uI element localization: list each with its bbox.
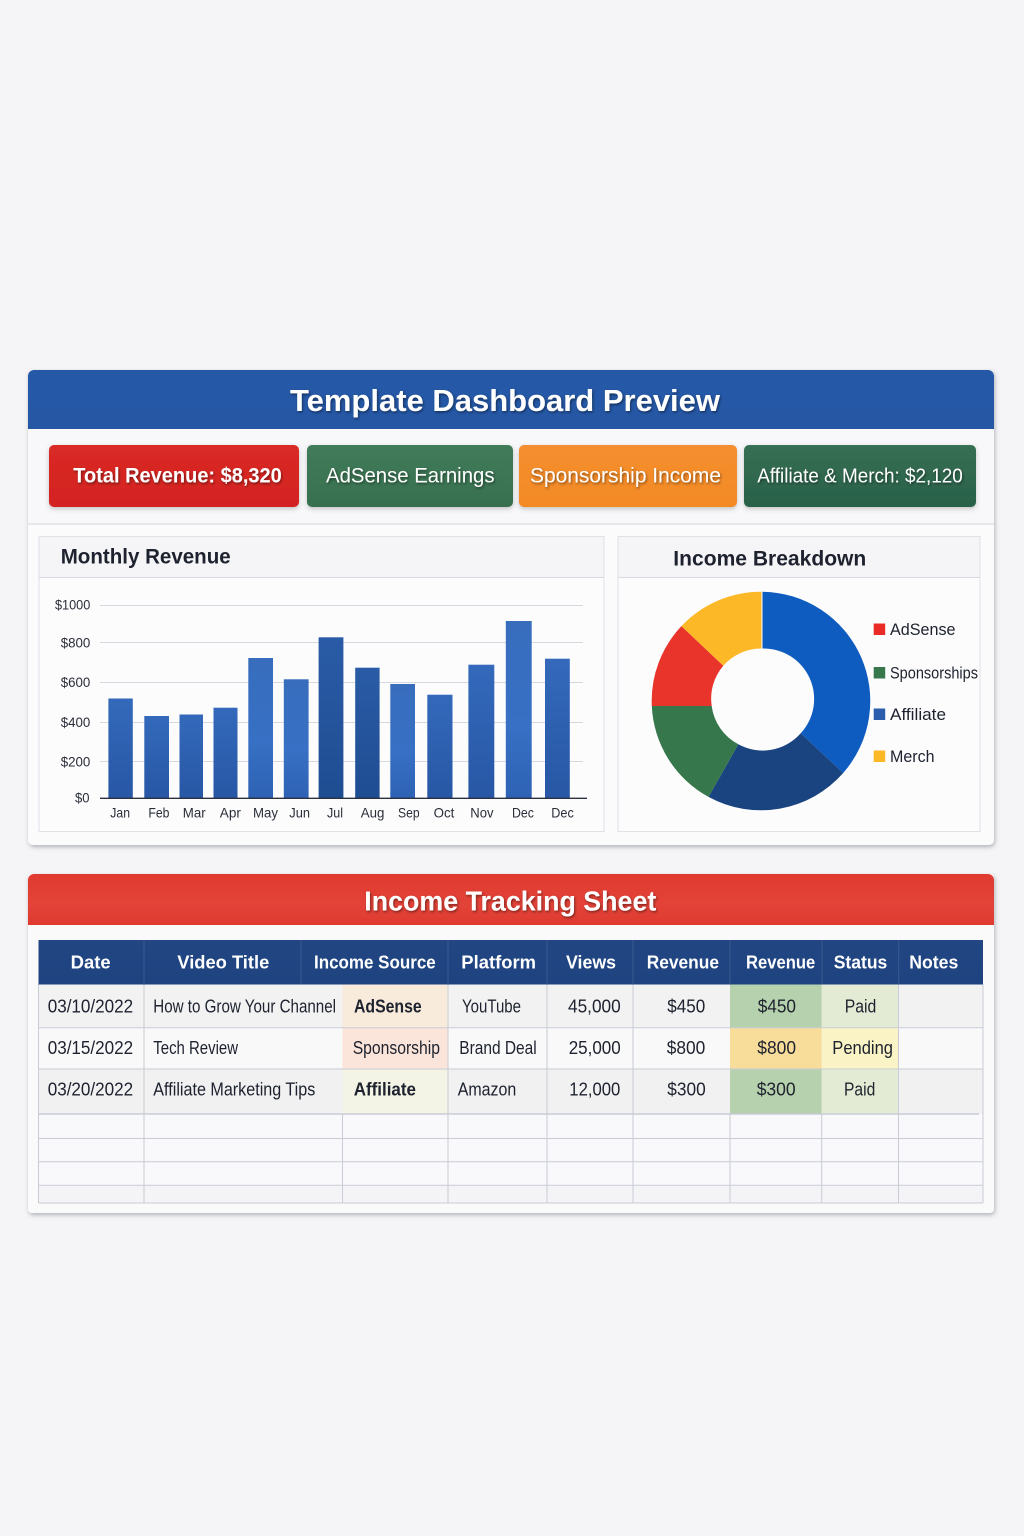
table header row: Notes xyxy=(909,952,958,972)
table row: 03/10/2022: YouTube xyxy=(462,997,521,1017)
table header row: Platform xyxy=(461,952,536,972)
table row: 03/10/2022: $450 xyxy=(758,997,796,1017)
table row: 03/15/2022: Brand Deal xyxy=(459,1038,537,1058)
KPI tile: adsense earnings xyxy=(307,445,513,507)
highlighted cells xyxy=(342,984,899,1114)
table xyxy=(38,940,983,1203)
table row: 03/20/2022: Paid xyxy=(844,1080,875,1100)
table header row xyxy=(38,940,983,984)
table row: 03/15/2022: Tech Review xyxy=(153,1038,239,1058)
table row: 03/10/2022: AdSense xyxy=(354,997,422,1017)
x axis labels: Jul xyxy=(327,805,343,821)
dashboard card body xyxy=(28,370,994,845)
panel: monthly revenue xyxy=(39,536,604,832)
table row: 03/15/2022 xyxy=(48,1038,893,1058)
x axis labels: Dec xyxy=(551,805,574,821)
KPI tile: total revenue xyxy=(49,445,299,507)
x axis labels: May xyxy=(253,805,278,821)
heading: income tracking sheet: Income Tracking Sheet xyxy=(364,886,656,916)
table header row: Income Source xyxy=(314,952,436,972)
x axis labels: Jun xyxy=(289,805,310,821)
table row: 03/10/2022: 45,000 xyxy=(568,997,621,1017)
heading: income breakdown: Income Breakdown xyxy=(673,548,866,570)
bar chart: monthly revenue xyxy=(55,596,587,821)
legend item: merch: Merch xyxy=(890,748,934,766)
table header row: Revenue xyxy=(746,952,815,972)
legend item: affiliate: Affiliate xyxy=(890,706,946,724)
x axis labels xyxy=(110,805,574,821)
KPI tile: total revenue: Total Revenue: $8,320 xyxy=(73,465,282,488)
table header row: Video Title xyxy=(177,952,269,972)
y axis labels: $400 xyxy=(61,714,90,730)
x axis labels: Apr xyxy=(220,805,241,821)
y axis labels: $200 xyxy=(61,753,90,769)
table row: 03/10/2022: Paid xyxy=(845,997,876,1017)
table header row: Views xyxy=(566,952,616,972)
table row: 03/15/2022: $800 xyxy=(757,1038,796,1058)
x axis labels: Nov xyxy=(470,805,494,821)
table row: 03/10/2022: How to Grow Your Channel xyxy=(153,997,336,1017)
legend item: adsense: AdSense xyxy=(890,621,956,639)
table row: 03/20/2022: Amazon xyxy=(458,1080,516,1100)
KPI tile: affiliate and merch xyxy=(744,445,976,507)
table row: 03/20/2022: 12,000 xyxy=(569,1080,620,1100)
table row: 03/20/2022 xyxy=(48,1080,875,1100)
panel: income breakdown xyxy=(618,536,980,832)
table row: 03/10/2022: $450 xyxy=(667,997,705,1017)
x axis labels: Feb xyxy=(148,805,170,821)
legend xyxy=(874,621,978,766)
heading: monthly revenue: Monthly Revenue xyxy=(61,546,231,568)
tracking sheet card body xyxy=(28,874,994,1213)
table header row: Revenue xyxy=(647,952,719,972)
y axis labels: $600 xyxy=(61,674,90,690)
table row: 03/20/2022: Affiliate Marketing Tips xyxy=(153,1080,315,1100)
x axis labels: Mar xyxy=(183,805,206,821)
table row: 03/15/2022: Sponsorship xyxy=(353,1038,440,1058)
x axis labels: Oct xyxy=(434,805,454,821)
bars xyxy=(108,621,570,798)
x axis labels: Sep xyxy=(398,805,420,821)
tracking sheet title banner xyxy=(28,874,994,925)
table row: 03/20/2022: Affiliate xyxy=(354,1080,416,1100)
panel: template dashboard preview xyxy=(28,370,994,845)
table row: 03/15/2022: $800 xyxy=(667,1038,705,1058)
legend item: sponsorships: Sponsorships xyxy=(890,664,978,682)
row backgrounds xyxy=(38,984,983,1203)
KPI tile: sponsorship income xyxy=(519,445,737,507)
KPI tile: sponsorship income: Sponsorship Income xyxy=(530,464,721,488)
grid lines xyxy=(38,984,983,1203)
donut chart xyxy=(652,592,870,810)
x axis labels: Jan xyxy=(110,805,130,821)
table row: 03/10/2022 xyxy=(48,997,876,1017)
table row: 03/15/2022: 25,000 xyxy=(569,1038,621,1058)
KPI tile: affiliate and merch: Affiliate & Merch: $2,120 xyxy=(757,466,963,488)
table row: 03/15/2022: 03/15/2022 xyxy=(48,1038,133,1058)
dashboard title banner xyxy=(28,370,994,429)
table row: 03/20/2022: 03/20/2022 xyxy=(48,1080,133,1100)
table header row: Date xyxy=(71,952,111,972)
table row: 03/10/2022: 03/10/2022 xyxy=(48,997,133,1017)
x axis labels: Aug xyxy=(361,805,384,821)
table row: 03/20/2022: $300 xyxy=(667,1080,706,1100)
y axis labels: $0 xyxy=(75,790,90,806)
x axis labels: Dec xyxy=(512,805,534,821)
KPI tile: adsense earnings: AdSense Earnings xyxy=(326,464,494,488)
heading: template dashboard preview: Template Dashboard Preview xyxy=(290,383,721,418)
y axis labels: $800 xyxy=(61,634,90,650)
table row: 03/20/2022: $300 xyxy=(757,1080,796,1100)
y axis labels: $1000 xyxy=(55,596,90,612)
y axis labels xyxy=(55,596,90,806)
table header row: Status xyxy=(834,952,887,972)
table row: 03/15/2022: Pending xyxy=(832,1038,893,1058)
panel: income tracking sheet xyxy=(28,874,994,1213)
